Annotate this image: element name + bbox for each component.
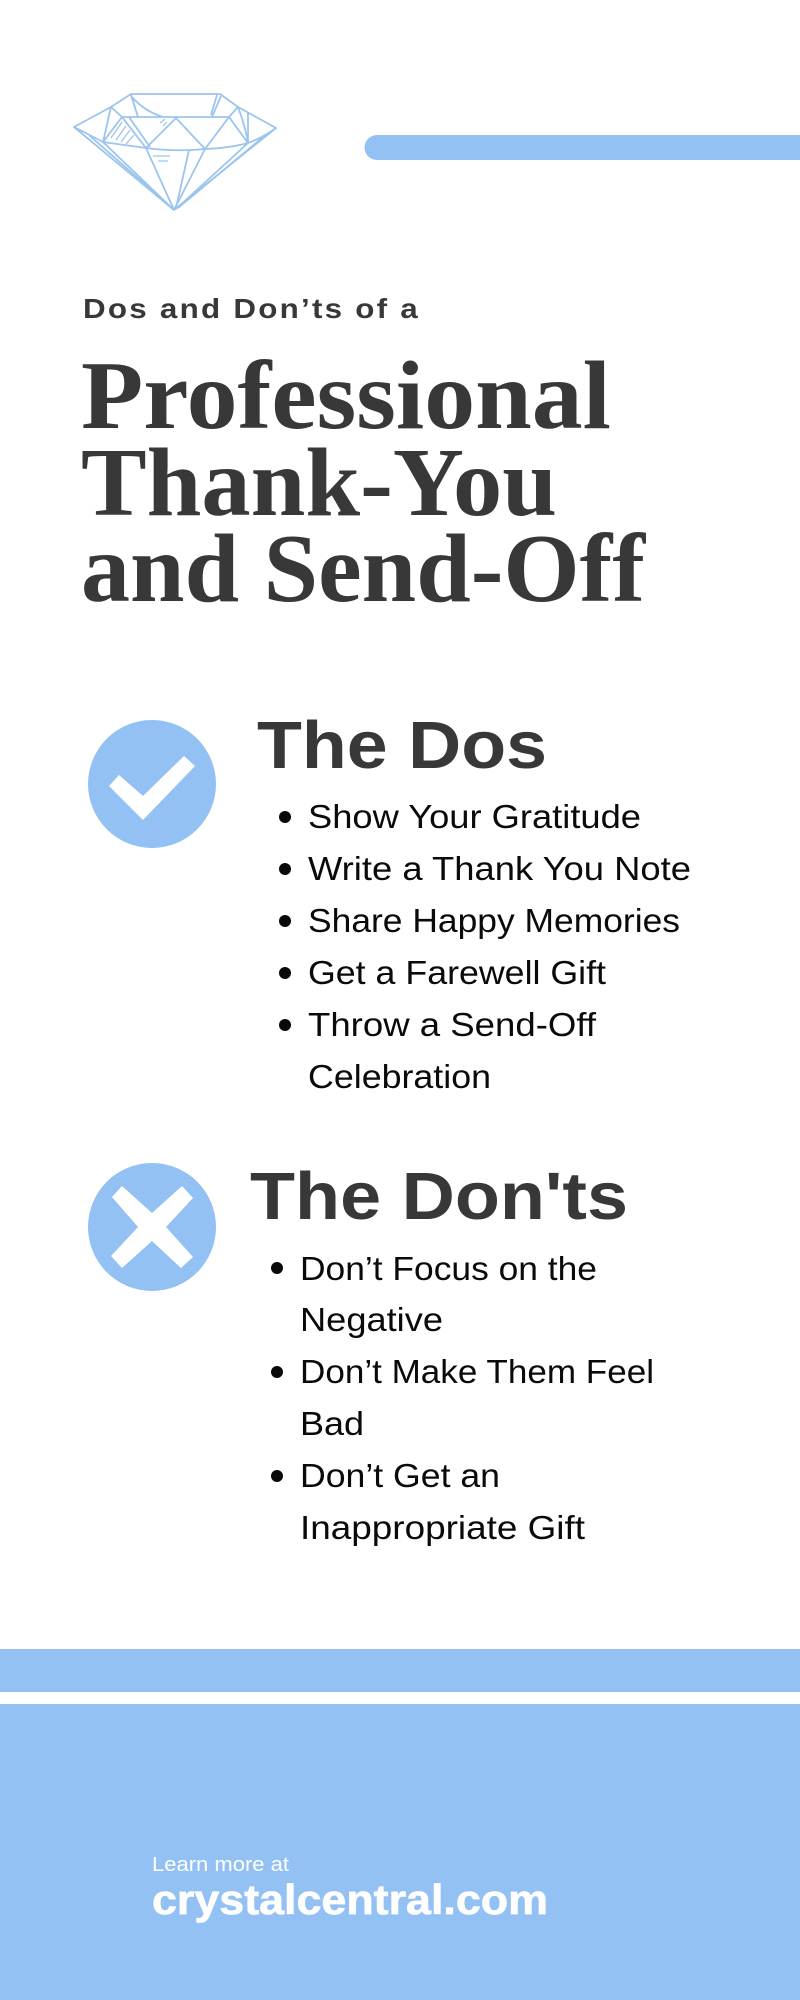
footer band	[0, 1649, 800, 1692]
list: don'ts items	[271, 1250, 654, 1546]
list: dos items: Celebration	[308, 1058, 491, 1095]
list: dos items: Share Happy Memories	[308, 902, 680, 939]
title: Thank-You	[81, 429, 557, 536]
list: dos items	[279, 798, 691, 1095]
list: don'ts items: Inappropriate Gift	[300, 1509, 585, 1546]
list: don'ts items: Bad	[300, 1405, 364, 1442]
panel: the don'ts	[88, 1159, 654, 1546]
list: dos items: Throw a Send-Off	[308, 1006, 597, 1043]
icon: check mark circle	[88, 720, 216, 848]
icon: cross circle	[88, 1163, 216, 1291]
footer label: Learn more at	[152, 1854, 289, 1876]
top accent bar	[365, 135, 800, 160]
icon: diamond	[74, 94, 276, 210]
footer url: crystalcentral.com	[152, 1876, 548, 1923]
list: don'ts items: Negative	[300, 1301, 443, 1338]
list: don'ts items: Don’t Make Them Feel	[300, 1353, 654, 1390]
list: dos items: Write a Thank You Note	[308, 850, 691, 887]
list: dos items: Show Your Gratitude	[308, 798, 641, 835]
list: don'ts items: Don’t Get an	[300, 1457, 500, 1494]
heading: the don'ts: The Don'ts	[250, 1159, 628, 1234]
list: don'ts items: Don’t Focus on the	[300, 1250, 597, 1287]
panel: the dos	[88, 708, 691, 1095]
title: and Send-Off	[81, 515, 647, 622]
title: Professional	[81, 342, 611, 449]
subtitle: Dos and Don’ts of a	[83, 293, 420, 324]
list: dos items: Get a Farewell Gift	[308, 954, 606, 991]
heading: the dos: The Dos	[257, 708, 547, 783]
panel: footer	[0, 1704, 800, 2000]
title	[81, 342, 647, 622]
